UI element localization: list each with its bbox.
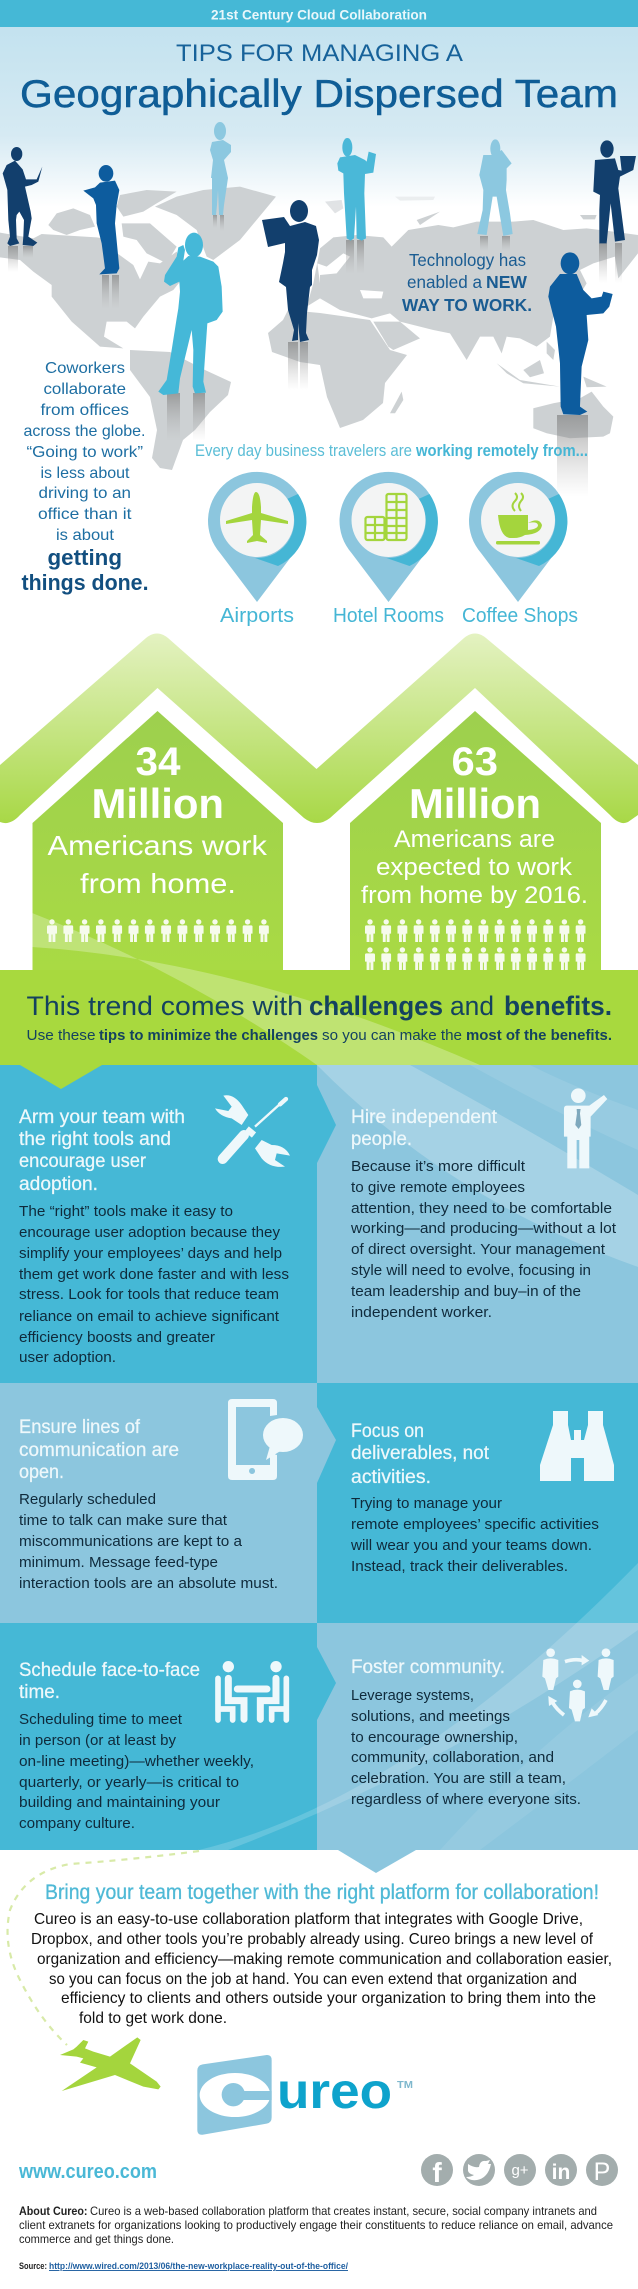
- body: arm your team: The “right” tools make it easy to: [19, 1203, 233, 1220]
- callout: new way to work: NEW: [486, 272, 527, 292]
- callout: new way to work: enabled a: [407, 272, 482, 292]
- body: arm your team: reliance on email to achieve significant: [19, 1308, 280, 1325]
- figure: light woman: [210, 122, 231, 215]
- pin: coffee shops: [469, 472, 567, 602]
- heading: schedule face-to-face: [19, 1660, 200, 1703]
- icon: binoculars: [540, 1411, 614, 1481]
- icon: buildings: [366, 494, 406, 540]
- source line: http://www.wired.com/2013/06/the-new-workplace-reality-out-of-the-office/: [49, 2261, 348, 2272]
- text: coworkers collaborate: getting: [48, 545, 122, 570]
- people silhouettes on map: [3, 122, 636, 497]
- icon: phone and speech bubble: [228, 1399, 303, 1480]
- body: cureo description: Dropbox, and other tools you’re probably already using. Cureo brings a new level of: [31, 1931, 594, 1948]
- text: every day business travelers: working remotely from...: [415, 442, 588, 460]
- social icons: P: [594, 2158, 610, 2186]
- icon: tools: [215, 1095, 290, 1167]
- top banner: [0, 0, 638, 27]
- heading: trend challenges and benefits: [26, 991, 612, 1021]
- social icons: [421, 2154, 618, 2188]
- body: arm your team: encourage user adoption because they: [19, 1224, 281, 1241]
- body: focus on deliverables: Trying to manage your: [351, 1495, 502, 1512]
- pin labels: Hotel Rooms: [333, 605, 444, 627]
- heading: bring your team together: Bring your team together with the right platform for collaboration!: [45, 1881, 599, 1904]
- body: hire independent: [350, 1158, 617, 1321]
- text: coworkers collaborate: collaborate: [44, 381, 126, 398]
- body: foster community: regardless of where everyone sits.: [351, 1791, 581, 1808]
- body: hire independent: team leadership and buy–in of the: [351, 1283, 581, 1300]
- website url: www.cureo.com: [18, 2161, 157, 2183]
- text: coworkers collaborate: is about: [56, 527, 115, 544]
- icon: green plane: [60, 2037, 161, 2091]
- heading: schedule face-to-face: time.: [19, 1682, 60, 1703]
- body: foster community: Leverage systems,: [351, 1687, 474, 1704]
- stat: 63 million: [361, 740, 588, 909]
- icon: airplane: [226, 492, 288, 543]
- panel: arm your team: [19, 1095, 290, 1366]
- houses roof band: [0, 634, 638, 823]
- people icons: 34 million: [47, 919, 269, 942]
- body: schedule face-to-face: building and maintaining your: [19, 1794, 220, 1811]
- logo: cureo: ureo: [277, 2063, 392, 2119]
- panel: ensure lines of communication: [19, 1399, 303, 1592]
- heading: hire independent: [351, 1107, 498, 1150]
- icon: meeting table: [218, 1661, 286, 1720]
- about cureo text: commerce and get things done.: [19, 2232, 174, 2246]
- main title: Geographically Dispersed Team: [20, 73, 618, 116]
- body: schedule face-to-face: [19, 1711, 254, 1832]
- body: ensure lines: miscommunications are kept to a: [19, 1533, 243, 1550]
- body: ensure lines: interaction tools are an absolute must.: [19, 1575, 278, 1592]
- text: coworkers collaborate: across the globe.: [24, 423, 146, 440]
- social icons: in: [552, 2161, 570, 2184]
- about cureo text: About Cureo:: [19, 2204, 88, 2218]
- icon: pointing man: [564, 1088, 607, 1168]
- stat: 63 million: from home by 2016.: [361, 882, 588, 909]
- heading: trend challenges and benefits: This trend comes with: [26, 991, 303, 1021]
- body: cureo description: [31, 1911, 612, 2027]
- text: coworkers collaborate: is less about: [40, 465, 130, 482]
- body: arm your team: user adoption.: [19, 1349, 116, 1366]
- top banner: 21st Century Cloud Collaboration: [211, 8, 427, 22]
- text: coworkers collaborate: office than it: [38, 506, 132, 523]
- figure: woman with tablet: [83, 165, 119, 274]
- body: hire independent: to give remote employees: [351, 1179, 525, 1196]
- text: every day business travelers: [195, 442, 588, 460]
- figure: man on phone: [477, 139, 513, 236]
- stat: 63 million: Americans are: [394, 826, 555, 853]
- hero background: [0, 27, 638, 207]
- heading: foster community: Foster community.: [351, 1657, 505, 1678]
- figure: man with laptop: [3, 147, 42, 246]
- callout: new way to work: [402, 250, 532, 315]
- text: coworkers collaborate: driving to an: [38, 485, 131, 502]
- heading: trend challenges and benefits: challenges: [309, 991, 443, 1021]
- decorative wave on green: [32, 913, 480, 1065]
- panel: hire independent people: [350, 1088, 617, 1321]
- stat: 34 million: 34: [136, 740, 181, 784]
- body: focus on deliverables: will wear you and your teams down.: [350, 1537, 592, 1554]
- body: arm your team: [19, 1203, 289, 1366]
- panel: foster community: [351, 1648, 614, 1808]
- heading: focus on deliverables: [351, 1421, 490, 1488]
- pin: hotel rooms: [340, 472, 438, 602]
- body: foster community: solutions, and meetings: [351, 1708, 510, 1725]
- source line: Source:: [19, 2261, 47, 2272]
- body: schedule face-to-face: company culture.: [19, 1815, 135, 1832]
- pin labels: Coffee Shops: [462, 605, 578, 627]
- pin: airports: [208, 472, 306, 602]
- body: foster community: to encourage ownership,: [351, 1729, 518, 1746]
- subheading: use these tips: Use these: [26, 1028, 96, 1044]
- body: hire independent: style will need to evolve, focusing in: [351, 1262, 591, 1279]
- heading: ensure lines: [19, 1417, 179, 1483]
- stat: 34 million: Americans work: [48, 830, 268, 861]
- house: 34 million: [32, 711, 283, 970]
- body: cureo description: Cureo is an easy-to-use collaboration platform that integrates with Google Drive,: [34, 1911, 583, 1928]
- body: foster community: celebration. You are still a team,: [351, 1770, 566, 1787]
- main title: [20, 40, 618, 116]
- logo: cureo: [197, 2055, 413, 2135]
- body: schedule face-to-face: in person (or at least by: [19, 1732, 176, 1749]
- body: hire independent: attention, they need to be comfortable: [351, 1200, 612, 1217]
- heading: arm your team: encourage user: [19, 1151, 147, 1172]
- body: focus on deliverables: Instead, track their deliverables.: [351, 1558, 568, 1575]
- icon: coffee cup: [496, 515, 542, 544]
- social icons: f: [432, 2157, 442, 2188]
- body: arm your team: efficiency boosts and greater: [19, 1329, 215, 1346]
- body: focus on deliverables: [350, 1495, 599, 1575]
- stat: 63 million: expected to work: [376, 854, 573, 881]
- body: foster community: [351, 1687, 581, 1808]
- heading: focus on deliverables: deliverables, not: [351, 1443, 490, 1464]
- callout: new way to work: WAY TO WORK.: [402, 295, 532, 315]
- stat: 34 million: [48, 740, 268, 899]
- about cureo text: client extranets for organizations looking to productively engage their constituents to reduce reliance on email, advance: [19, 2218, 613, 2232]
- body: arm your team: simplify your employees’ days and help: [19, 1245, 282, 1262]
- heading: hire independent: Hire independent: [351, 1107, 498, 1128]
- figure: woman with folder: [262, 200, 319, 342]
- text: coworkers collaborate: [22, 360, 148, 595]
- body: schedule face-to-face: on-line meeting)—whether weekly,: [19, 1753, 254, 1770]
- body: foster community: community, collaboration, and: [351, 1749, 554, 1766]
- heading: trend challenges and benefits: and: [450, 991, 494, 1021]
- body: arm your team: stress. Look for tools that reduce team: [19, 1286, 279, 1303]
- body: schedule face-to-face: Scheduling time to meet: [19, 1711, 183, 1728]
- stat: 34 million: from home.: [80, 868, 236, 899]
- heading: ensure lines: Ensure lines of: [19, 1417, 141, 1438]
- body: arm your team: them get work done faster and with less: [19, 1266, 289, 1283]
- people icons: 63 million: [365, 919, 586, 970]
- pin labels: [220, 605, 578, 627]
- about cureo text: Cureo is a web-based collaboration platform that creates instant, secure, social company intranets and: [90, 2204, 597, 2218]
- text: coworkers collaborate: Coworkers: [45, 360, 125, 377]
- heading: arm your team: the right tools and: [19, 1129, 171, 1150]
- green trend band: [0, 970, 638, 1065]
- body: cureo description: efficiency to clients and others outside your organization to bring them into the: [61, 1990, 596, 2007]
- subheading: use these tips: tips to minimize the challenges: [99, 1028, 318, 1044]
- heading: trend challenges and benefits: benefits.: [504, 991, 612, 1021]
- body: cureo description: fold to get work done.: [79, 2010, 227, 2027]
- reflections under feet: [8, 215, 622, 497]
- body: hire independent: working—and producing—without a lot: [350, 1220, 617, 1237]
- heading: focus on deliverables: activities.: [351, 1467, 431, 1488]
- stat: 63 million: 63: [452, 740, 498, 784]
- heading: arm your team: Arm your team with: [19, 1107, 185, 1128]
- heading: schedule face-to-face: Schedule face-to-face: [19, 1660, 200, 1681]
- body: hire independent: of direct oversight. Your management: [351, 1241, 606, 1258]
- text: every day business travelers: Every day business travelers are: [195, 442, 412, 460]
- heading: hire independent: people.: [351, 1129, 412, 1150]
- pin labels: Airports: [220, 605, 294, 627]
- panel: schedule face-to-face: [19, 1660, 286, 1832]
- heading: arm your team: adoption.: [19, 1174, 98, 1195]
- dotted flight path: [8, 1851, 199, 2045]
- social icons: g+: [511, 2162, 529, 2179]
- stat: 63 million: Million: [409, 780, 541, 827]
- heading: ensure lines: open.: [19, 1462, 64, 1483]
- body: ensure lines: Regularly scheduled: [19, 1491, 156, 1508]
- heading: ensure lines: communication are: [19, 1440, 179, 1461]
- body: focus on deliverables: remote employees’ specific activities: [351, 1516, 599, 1533]
- decorative waves on panels: [317, 1065, 638, 1267]
- about cureo text: [19, 2204, 613, 2246]
- panel: focus on deliverables: [350, 1411, 614, 1575]
- text: coworkers collaborate: “Going to work”: [26, 444, 143, 461]
- heading: focus on deliverables: Focus on: [351, 1421, 424, 1442]
- body: cureo description: organization and efficiency—making remote communication and collaboration easier,: [37, 1951, 612, 1968]
- figure: woman with laptop: [593, 140, 636, 243]
- subheading: use these tips: so you can make the: [322, 1028, 462, 1044]
- subheading: use these tips: [26, 1028, 612, 1044]
- house: 63 million: [350, 711, 601, 970]
- figure: large man on phone: [158, 233, 223, 395]
- body: hire independent: Because it’s more difficult: [351, 1158, 526, 1175]
- main title: TIPS FOR MANAGING A: [176, 40, 463, 67]
- figure: large man with phone: [548, 252, 613, 415]
- body: cureo description: so you can focus on the job at hand. You can even extend that organization and: [49, 1971, 577, 1988]
- body: ensure lines: time to talk can make sure that: [19, 1512, 228, 1529]
- panel arrows: [20, 1065, 416, 1873]
- panel backgrounds: [0, 1065, 638, 1850]
- heading: arm your team: [19, 1107, 185, 1195]
- stat: 34 million: Million: [92, 780, 224, 827]
- subheading: use these tips: most of the benefits.: [466, 1028, 612, 1044]
- body: schedule face-to-face: quarterly, or yearly—is critical to: [19, 1774, 239, 1791]
- body: ensure lines: [19, 1491, 278, 1592]
- logo: cureo: TM: [397, 2080, 413, 2091]
- world map: [0, 187, 638, 470]
- callout: new way to work: Technology has: [409, 250, 526, 270]
- body: ensure lines: minimum. Message feed-type: [19, 1554, 218, 1571]
- icon: community cycle: [542, 1648, 614, 1721]
- text: coworkers collaborate: things done.: [22, 570, 148, 595]
- body: hire independent: independent worker.: [351, 1304, 492, 1321]
- figure: man with tablet: [337, 138, 376, 241]
- text: coworkers collaborate: from offices: [40, 402, 129, 419]
